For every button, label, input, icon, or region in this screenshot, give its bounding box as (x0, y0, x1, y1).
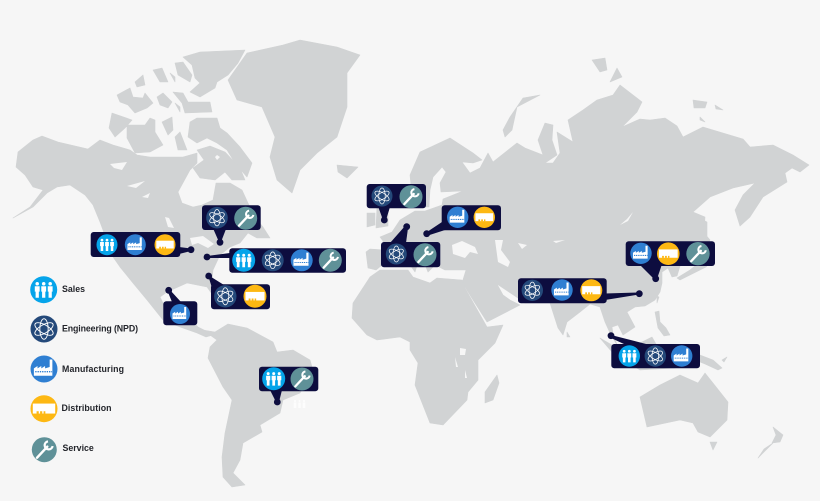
legend: manufacturing (30, 356, 124, 382)
landmass: Canadian Arctic islands (109, 50, 252, 180)
legend: manufacturing: Manufacturing (62, 364, 124, 374)
callout: eastern United States (204, 248, 346, 273)
legend: sales (30, 276, 85, 303)
landmass: Tasmania (710, 442, 717, 450)
landmass: Japan (677, 260, 712, 280)
legend: service: Service (62, 443, 94, 453)
landmass: South America (203, 324, 312, 487)
callout: Brazil (259, 367, 318, 405)
landmass: British Isles (367, 206, 388, 228)
legend: engineering: Engineering (NPD) (62, 324, 138, 334)
landmass: New Zealand (758, 427, 783, 458)
callout: Mexico (163, 287, 197, 325)
legend: engineering (30, 316, 138, 342)
callout: southern Europe (381, 223, 440, 267)
legend: distribution: Distribution (62, 403, 112, 413)
landmass: Svalbard (592, 58, 622, 82)
callout: western North America (91, 232, 194, 257)
callout: East Asia (626, 241, 715, 282)
legend: sales: Sales (62, 284, 85, 294)
callout: United Kingdom (367, 184, 426, 223)
lakes and inland seas (110, 155, 633, 378)
landmass: Australia (640, 373, 728, 437)
landmass: Madagascar (485, 375, 499, 403)
landmass: Greenland (228, 40, 360, 193)
callout: Canada (202, 205, 261, 246)
landmass: North America (13, 136, 270, 337)
landmass: Sakhalin (703, 220, 707, 240)
landmass: Southeast Asian islands (567, 296, 727, 370)
landmass: Eurasia (366, 85, 809, 345)
callout: Germany (423, 205, 501, 237)
legend: service (32, 437, 94, 462)
landmass: Iceland (337, 165, 358, 178)
landmass: Africa (352, 270, 503, 425)
callout: Southeast Asia (608, 332, 700, 368)
landmass: Novaya Zemlya (503, 95, 540, 137)
landmass: Severnaya Zemlya (693, 100, 723, 122)
legend: distribution (30, 395, 112, 422)
callout: central Asia and China (518, 278, 643, 303)
callout: southern United States (205, 273, 270, 309)
legend (30, 276, 138, 462)
faint white sales figures on Brazil (294, 400, 305, 408)
